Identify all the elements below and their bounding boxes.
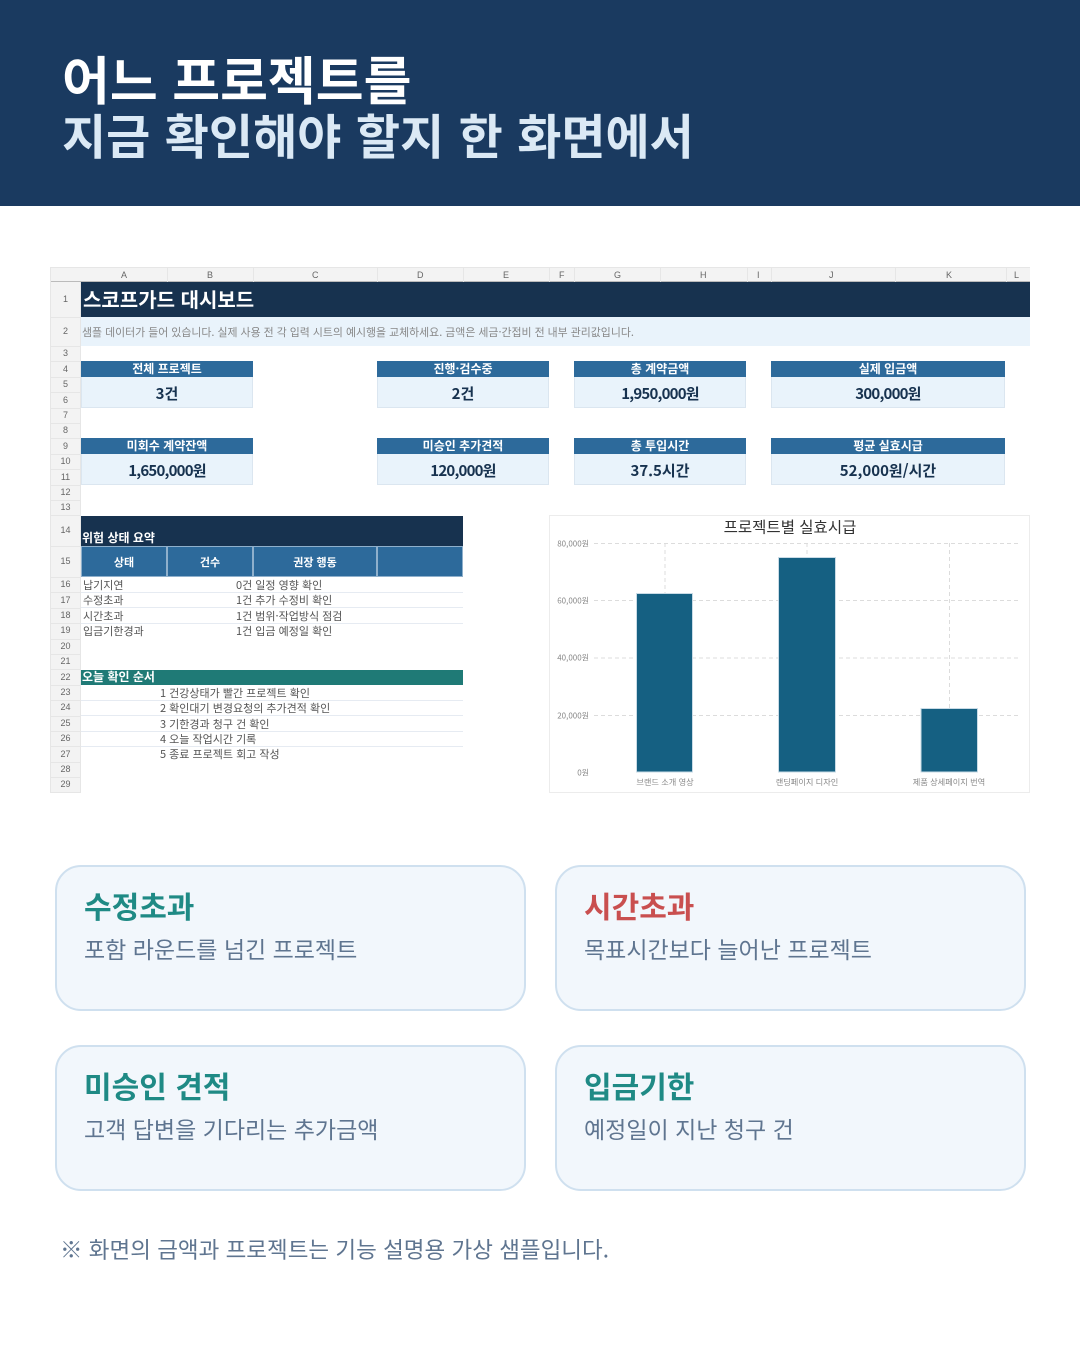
row headers: 21 [60,656,70,666]
bar chart: hourly rate by project: 랜딩페이지 디자인 [776,776,838,788]
row headers: 26 [60,733,70,743]
column headers: G [614,270,621,280]
card: revision overrun: 포함 라운드를 넘긴 프로젝트 [84,931,357,965]
row headers: 18 [60,610,70,620]
row headers: 3 [63,348,68,358]
row headers: 8 [63,425,68,435]
title line 1: 어느 프로젝트를 [62,40,411,115]
risk table rows: 입금기한경과 [83,623,144,639]
bar chart: hourly rate by project: 제품 상세페이지 번역 [913,776,985,788]
column headers: J [829,270,834,280]
card: time overrun: 시간초과 [584,883,694,927]
row headers: 19 [60,625,70,635]
KPI: total hours [574,437,746,485]
KPI: total projects [81,360,253,408]
row headers: 23 [60,687,70,697]
row headers: 28 [60,764,70,774]
row headers: 11 [61,472,70,482]
KPI: total contract: 총 계약금액 [631,360,689,377]
row headers: 7 [63,410,68,420]
today's check list: 4 오늘 작업시간 기록 [160,731,256,747]
KPI: total hours: 총 투입시간 [631,437,689,454]
KPI: total hours: 37.5시간 [630,460,690,481]
bar chart: hourly rate by project: 0원 [577,768,589,778]
sheet note [81,317,1030,346]
footnote: ※ 화면의 금액과 프로젝트는 기능 설명용 가상 샘플입니다. [60,1233,609,1265]
card: unapproved estimate: 고객 답변을 기다리는 추가금액 [84,1111,378,1145]
row headers: 25 [60,718,70,728]
bar chart: hourly rate by project: 브랜드 소개 영상 [636,776,694,788]
KPI: in progress: 2건 [452,383,474,404]
row headers: 1 [63,294,68,304]
row headers: 12 [60,487,70,497]
column headers: A [121,270,127,280]
today's check list [81,685,463,762]
KPI: average hourly [771,437,1005,485]
column headers: C [312,270,318,280]
column headers [50,267,1030,282]
sheet note: 샘플 데이터가 들어 있습니다. 실제 사용 전 각 입력 시트의 예시행을 교체하세요. 금액은 세금·간접비 전 내부 관리값입니다. [82,324,634,340]
risk summary heading: 위험 상태 요약 [82,529,155,546]
KPI: in progress [377,360,549,408]
risk table rows: 0건 일정 영향 확인 [236,577,322,593]
bar chart: hourly rate by project: 20,000원 [557,710,589,722]
row headers: 27 [60,749,70,759]
card: time overrun: 목표시간보다 늘어난 프로젝트 [584,931,872,965]
column headers: H [700,270,706,280]
bar chart: hourly rate by project: 80,000원 [557,538,589,550]
today's check list: 5 종료 프로젝트 회고 작성 [160,746,280,762]
card: payment deadline: 입금기한 [584,1063,694,1107]
KPI: outstanding balance: 1,650,000원 [128,460,206,481]
row headers: 14 [60,525,70,535]
card: revision overrun: 수정초과 [84,883,194,927]
risk table rows: 수정초과 [83,592,123,608]
risk summary heading [81,516,463,547]
card: payment deadline [555,1045,1026,1191]
header banner [0,0,1080,206]
risk table rows: 1건 범위·작업방식 점검 [236,608,342,624]
row headers: 29 [60,779,70,789]
row headers: 13 [60,502,70,512]
KPI: outstanding balance [81,437,253,485]
KPI: outstanding balance: 미회수 계약잔액 [127,437,207,454]
KPI: unapproved estimate [377,437,549,485]
risk table rows: 시간초과 [83,608,123,624]
row headers: 6 [63,395,68,405]
card: payment deadline: 예정일이 지난 청구 건 [584,1111,794,1145]
KPI: total contract: 1,950,000원 [621,383,699,404]
bar chart: hourly rate by project: 60,000원 [557,596,589,606]
row headers: 20 [60,641,70,651]
row headers: 9 [63,441,68,451]
KPI: actual received: 실제 입금액 [859,360,917,377]
row headers: 4 [63,364,68,374]
risk table rows: 납기지연 [83,577,123,593]
bar chart: hourly rate by project: 40,000원 [557,652,589,664]
KPI: average hourly: 52,000원/시간 [840,460,936,481]
card: time overrun [555,865,1026,1011]
KPI: unapproved estimate: 120,000원 [430,460,496,481]
card: revision overrun [55,865,526,1011]
risk table rows: 1건 추가 수정비 확인 [236,592,332,608]
title line 2: 지금 확인해야 할지 한 화면에서 [62,98,694,168]
risk table header: 권장 행동 [293,554,337,570]
today's check heading [81,670,463,685]
risk table header: 건수 [200,554,220,570]
bar chart: hourly rate by project [549,515,1030,793]
risk table rows [81,577,463,639]
column headers: K [946,270,952,280]
sheet title bar [81,282,1030,317]
column headers: B [207,270,213,280]
row headers: 2 [63,326,68,336]
KPI: average hourly: 평균 실효시급 [853,437,923,454]
row headers: 22 [60,672,70,682]
column headers: E [503,270,509,280]
today's check list: 3 기한경과 청구 건 확인 [160,716,270,732]
column headers: L [1014,270,1019,280]
row headers: 16 [60,579,70,589]
today's check list: 2 확인대기 변경요청의 추가견적 확인 [160,700,330,716]
row headers: 24 [60,702,70,712]
KPI: unapproved estimate: 미승인 추가견적 [423,437,503,454]
KPI: total projects: 3건 [156,383,178,404]
row headers [50,282,81,793]
risk table rows: 1건 입금 예정일 확인 [236,623,332,639]
today's check list: 1 건강상태가 빨간 프로젝트 확인 [160,685,310,701]
risk table header: 상태 [114,554,134,570]
risk table header [81,546,463,577]
sheet title bar: 스코프가드 대시보드 [83,284,254,313]
spreadsheet screenshot [50,267,1030,793]
card: unapproved estimate [55,1045,526,1191]
column headers: F [559,270,564,280]
row headers: 17 [60,595,70,605]
KPI: actual received: 300,000원 [855,383,921,404]
column headers: I [757,270,760,280]
KPI: total projects: 전체 프로젝트 [132,360,202,377]
KPI: actual received [771,360,1005,408]
KPI: in progress: 진행·검수중 [433,360,493,377]
card: unapproved estimate: 미승인 견적 [84,1063,230,1107]
row headers: 10 [60,456,70,466]
row headers: 5 [63,379,68,389]
row headers: 15 [60,556,70,566]
KPI: total contract [574,360,746,408]
bar chart: hourly rate by project: 프로젝트별 실효시급 [724,516,856,538]
column headers: D [417,270,424,280]
today's check heading: 오늘 확인 순서 [82,668,155,685]
